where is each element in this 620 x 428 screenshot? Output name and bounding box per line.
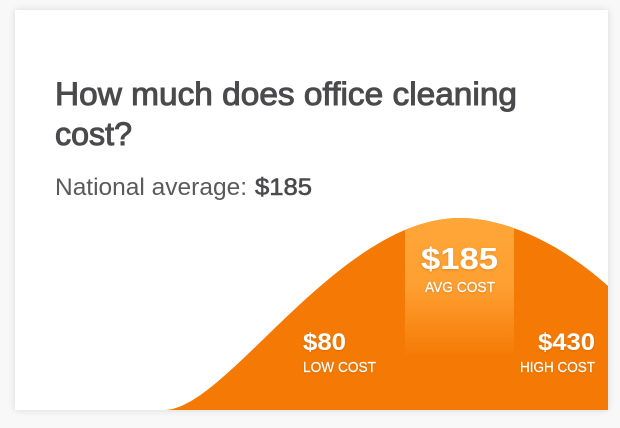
- label: high cost: $430: [538, 329, 595, 356]
- label: low cost: $80: [303, 329, 346, 356]
- subtitle: national average: $185: [255, 174, 312, 201]
- label: high cost: HIGH COST: [520, 360, 595, 376]
- label: average cost: [421, 241, 498, 296]
- chart: cost bell curve: [165, 210, 608, 410]
- label: high cost: [520, 329, 595, 376]
- average cost highlighted band: [405, 218, 514, 344]
- title second line: cost?: [55, 116, 132, 152]
- title: How much does office cleaning: [55, 76, 517, 112]
- label: low cost: LOW COST: [303, 360, 376, 376]
- subtitle: national average: National average:: [55, 174, 247, 201]
- label: average cost: $185: [421, 241, 498, 276]
- label: low cost: [303, 329, 376, 376]
- label: average cost: AVG COST: [425, 280, 495, 296]
